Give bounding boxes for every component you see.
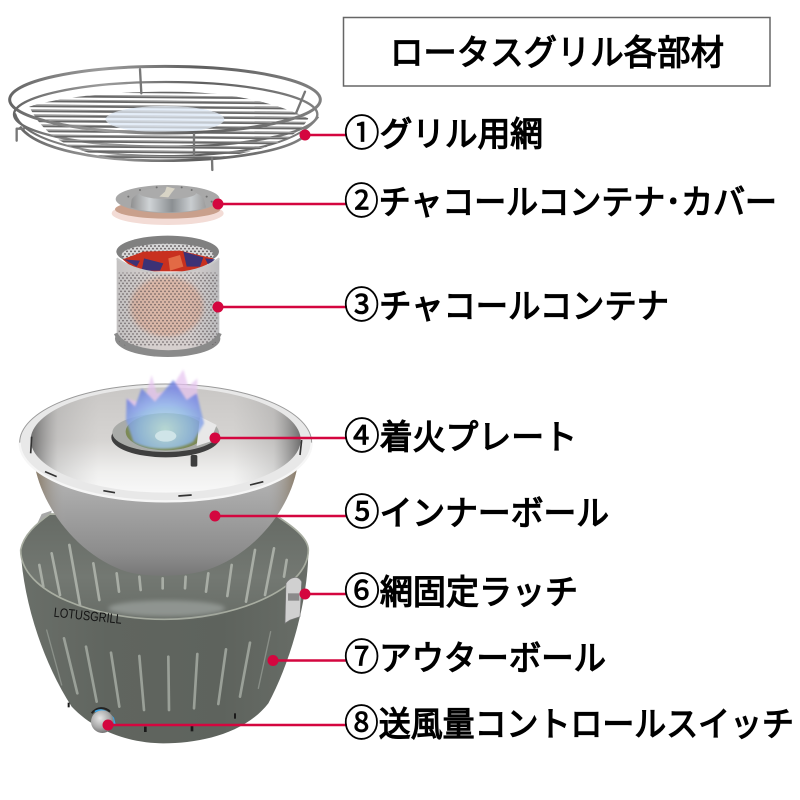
illustration: grill net	[10, 66, 320, 170]
callout 8: air control switch	[102, 703, 794, 744]
callout 6: grill net latch: ⑥網固定ラッチ	[344, 571, 578, 612]
title: ロータスグリル各部材	[390, 34, 724, 73]
callout 7: outer bowl: ⑦アウターボール	[344, 637, 606, 678]
bottom vents	[68, 703, 236, 732]
callout 5: inner bowl	[210, 492, 609, 533]
illustration: charcoal container	[115, 236, 220, 357]
callout 4: ignition plate: ④着火プレート	[344, 416, 577, 457]
callout 1: grill net: ①グリル用網	[344, 113, 543, 154]
illustration: grill net latch	[285, 577, 302, 623]
callout 4: ignition plate	[210, 416, 577, 457]
outer bowl rim and interior	[21, 514, 308, 619]
inner wall slots	[39, 545, 287, 605]
callout 3: charcoal container	[212, 285, 669, 326]
illustration: charcoal container cover	[112, 185, 224, 225]
outer wall slots	[47, 630, 271, 710]
illustration: outer bowl	[21, 511, 308, 743]
illustration: inner bowl	[20, 384, 312, 576]
callout 5: inner bowl: ⑤インナーボール	[344, 492, 609, 533]
illustration: ignition plate and flame	[111, 369, 220, 467]
illustration: air control switch	[91, 708, 115, 733]
callout 2: charcoal container cover: ②チャコールコンテナ･カバー	[344, 181, 777, 222]
callout 3: charcoal container: ③チャコールコンテナ	[344, 285, 669, 326]
brand logo: LOTUSGRILL	[53, 605, 123, 627]
title	[344, 18, 770, 86]
